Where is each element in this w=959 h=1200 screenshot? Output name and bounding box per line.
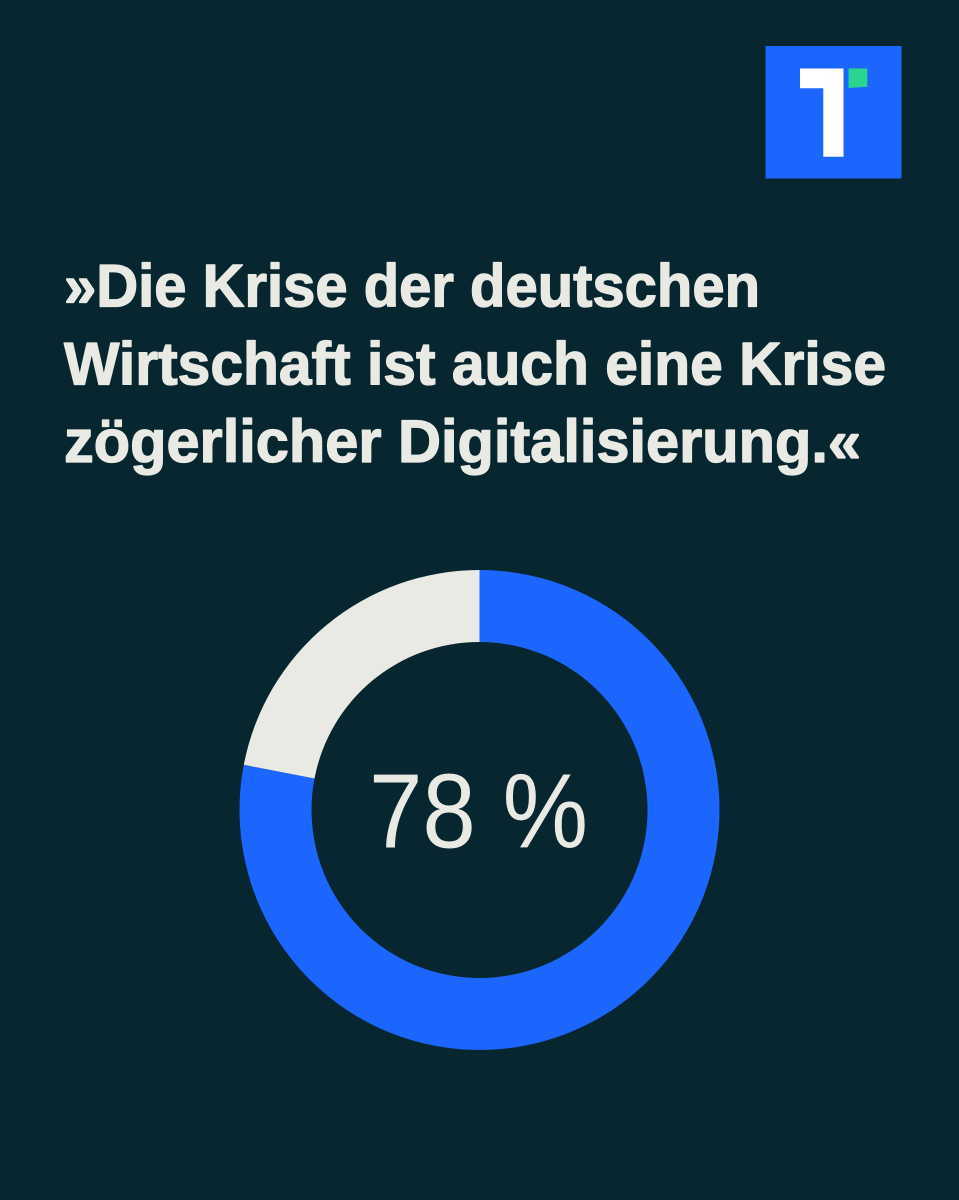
donut segment: 78 percent blue (240, 570, 720, 1050)
heading: quote (64, 252, 886, 475)
heading: quote: Wirtschaft ist auch eine Krise (64, 330, 886, 398)
icon: logo (766, 46, 902, 178)
donut chart: 78 percent (240, 570, 720, 1050)
heading: quote: zögerlicher Digitalisierung.« (64, 408, 861, 475)
heading: quote: »Die Krise der deutschen (64, 252, 760, 320)
donut segment: remaining grey (244, 570, 480, 778)
value label: 78 % (369, 752, 588, 870)
